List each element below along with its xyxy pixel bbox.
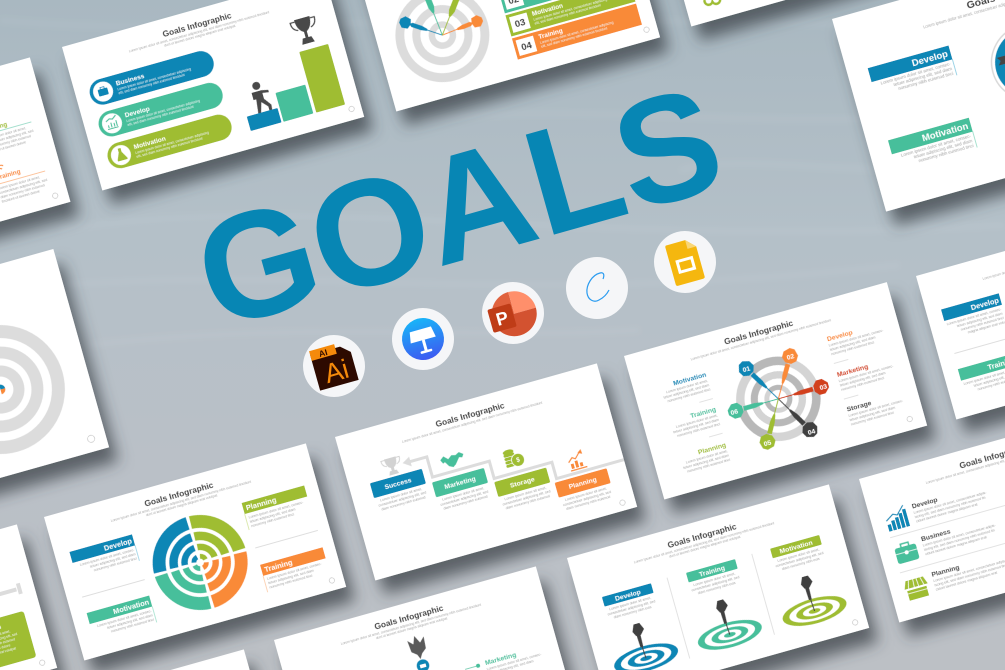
text: storage: tetuer adipiscing elit, sed diam: [849, 406, 896, 422]
dart numbers: 03: [819, 383, 828, 392]
pill: motivation: Lorem ipsum dolor sit amet, consectetuer adipiscing: [135, 131, 209, 155]
title: Goals Infographic: [434, 400, 506, 429]
subtitle: dunt ut laoreet dolore magna aliquam erat volutpat.: [164, 24, 237, 48]
label: develop: [941, 293, 1005, 340]
text: storage: Lorem ipsum dolor sit amet, consec-: [848, 399, 904, 418]
label: marketing: Marketing: [484, 652, 517, 667]
text: storage: Storage: [846, 400, 873, 414]
dart 03: [776, 378, 830, 406]
tag: develop: diam nonummy nibh euis: [613, 605, 652, 619]
text: develop: nonummy nibh euismod tinci: [831, 340, 875, 356]
label: training: tetuer adipiscing elit, sed diam: [268, 569, 314, 585]
box: storage: consectetuer adipiscing elit, sed: [502, 489, 551, 507]
text: motivation: Motivation: [673, 372, 707, 388]
label: motivation: nonummy nibh euismod tinci: [918, 143, 974, 163]
text: business: Lorem ipsum dolor sit amet, consectetuer adipis-: [922, 523, 997, 548]
text: business: iscing elit, sed diam nonummy nibh euismod tin: [924, 528, 995, 552]
icon: bag: [893, 540, 920, 564]
text: training: Lorem ipsum dolor sit amet,: [675, 413, 718, 429]
text: marketing: [836, 357, 897, 392]
icon: trophy: [290, 15, 321, 46]
text: marketing: nonummy nibh euismod tinci: [841, 376, 885, 392]
slide: bottom left partial: [0, 524, 57, 670]
target badge: [983, 16, 1005, 109]
icon: handshake: [439, 451, 466, 470]
subtitle: dunt ut laoreet dolore magna aliquam erat volutpat.: [669, 535, 742, 559]
tag: motivation: consectetuer adipiscing elit, sed: [775, 551, 824, 568]
segmented target rings: [731, 352, 825, 446]
dart: green: [440, 0, 463, 36]
box: planning: diam nonummy nibh euismod: [566, 495, 611, 511]
label: training: [958, 353, 1005, 395]
text: planning: cidunt laoreet dolore magna aliquam erat: [935, 571, 998, 592]
box: storage: Storage: [509, 476, 536, 490]
page number: [906, 416, 913, 422]
text: marketing: Lorem ipsum dolor sit amet, consec-: [838, 364, 895, 383]
tag: training: Training: [698, 565, 726, 579]
tag: training: [686, 559, 742, 597]
text: develop: [826, 321, 887, 356]
page number: [619, 499, 626, 506]
dart numbers: [720, 347, 839, 456]
dart numbers: 02: [786, 353, 795, 362]
label: develop: Lorem ipsum dolor sit amet, consec-: [946, 307, 1002, 326]
label: motivation: Lorem ipsum dolor sit amet, consec-: [900, 133, 972, 158]
box: marketing: [432, 468, 492, 512]
text: marketing: Marketing: [836, 363, 869, 379]
dividers: [890, 468, 1005, 573]
label: marketing: [484, 645, 544, 670]
slide: six darts: [624, 282, 927, 499]
subtitle: Lorem ipsum dolor sit amet, consectetuer adipiscing elit, sed diam nonummy nibh euismod tincidunt: [402, 401, 543, 444]
dart numbers: 04: [807, 428, 817, 437]
title: Goals Infographic: [161, 10, 233, 39]
dart target: green: [773, 567, 850, 632]
icon: green partial: [704, 0, 721, 7]
icon: orange signal: [0, 165, 5, 174]
text: motivation: [660, 372, 711, 404]
icon: bar chart: [883, 505, 910, 532]
row 03: 03: [514, 17, 527, 30]
dart 06: [726, 392, 780, 420]
pill: motivation: Motivation: [133, 135, 167, 151]
slide: icon list: [859, 405, 1005, 622]
tag: develop: Develop: [614, 589, 642, 603]
text: planning: Lorem ipsum dolor sit amet,: [685, 449, 728, 465]
text: marketing: tetuer adipiscing elit, sed diam: [840, 371, 886, 388]
slide: bottom left corner partial: [0, 649, 284, 670]
text: planning: Planning: [697, 442, 727, 456]
dart: teal: [422, 0, 445, 36]
icon: blue circle: [415, 658, 431, 670]
label: motivation: tetuer adipiscing elit, sed diam: [107, 613, 153, 630]
text: develop: iscing elit, sed diam nonummy nibh euismod tin: [914, 496, 986, 519]
icon: growth chart: [566, 448, 588, 472]
row 03: [505, 0, 636, 37]
tag: motivation: Lorem ipsum dolor sit amet,: [777, 548, 820, 563]
dart target: blue: [605, 615, 681, 670]
label: develop: nonummy nibh euismod tinci: [93, 556, 137, 572]
row 04: Lorem ipsum dolor sit amet, consectetuer adipiscing: [540, 20, 614, 45]
text: business: Business: [920, 528, 952, 543]
text: planning: nonummy nibh euismod tinci: [687, 458, 731, 474]
dart 01: [735, 358, 783, 404]
label: develop: tetuer adipiscing elit, sed diam: [90, 552, 136, 569]
tag: motivation: [770, 535, 826, 573]
label: motivation: Lorem ipsum dolor sit amet, consec-: [97, 609, 153, 628]
label: develop: Develop: [911, 49, 949, 69]
icon: coins: [502, 446, 526, 470]
row 04: [512, 4, 642, 60]
label: develop: [868, 45, 957, 98]
slide: dart target with numbered rows: [356, 0, 660, 111]
lines and lorem text: diam nonummy nibh euismod: [0, 183, 45, 199]
label: develop: Develop: [103, 536, 133, 553]
text: training: [670, 406, 721, 439]
label: develop: tetuer adipiscing elit, sed diam: [956, 312, 1003, 328]
dart 05: [758, 397, 786, 451]
small dividers: [699, 359, 858, 437]
subtitle: Lorem ipsum dolor sit amet, consectetuer adipiscing elit, sed diam nonummy nibh euismod tincidunt: [690, 318, 831, 362]
page number: [643, 26, 650, 33]
slide: quadrant donut: [44, 443, 346, 660]
page number: [87, 434, 96, 443]
text: develop: Develop: [826, 329, 854, 343]
label: planning: [242, 485, 312, 530]
divider: [954, 336, 1005, 353]
app icon: google slides: [647, 224, 723, 300]
pill: business: [87, 48, 217, 108]
label: develop: magna aliquam erat volu: [967, 320, 1005, 334]
icon: gray arrow tail: [406, 633, 429, 661]
label: planning: nonummy nibh euismod tinci: [251, 512, 295, 528]
label: develop: tetuer adipiscing elit, sed diam: [893, 66, 953, 87]
row 04: Training: [538, 28, 564, 41]
main heading: GOALS: GOALS: [179, 53, 739, 360]
tag: motivation: diam nonummy nibh euis: [782, 557, 820, 571]
label: motivation: tetuer adipiscing elit, sed diam: [913, 138, 973, 159]
tag: develop: consectetuer adipiscing elit, sed: [607, 599, 656, 617]
dart 02: [771, 347, 799, 401]
dart: blue: [398, 15, 444, 41]
app icon: illustrator: AI: [318, 347, 329, 359]
connector: [465, 663, 481, 670]
label: motivation: [87, 595, 157, 640]
text: develop: [911, 483, 990, 524]
box: motivation: [0, 611, 36, 670]
quadrant target chart: [150, 512, 251, 613]
label: training: Lorem ipsum dolor sit amet, consec-: [267, 562, 323, 581]
tag: training: consectetuer adipiscing elit, sed: [691, 575, 740, 592]
title: Goals Infographic: [143, 480, 215, 509]
label: motivation: [888, 118, 977, 170]
text: develop: Lorem ipsum dolor sit amet, consec-: [828, 328, 885, 348]
text: training: Training: [690, 406, 717, 420]
box: success: diam nonummy nibh euismod: [381, 495, 426, 512]
target centre: [0, 383, 7, 394]
lines and lorem text: tincidunt ut laoreet dolore: [1, 189, 40, 204]
dividers: [82, 530, 318, 597]
tag: training: diam nonummy nibh euis: [697, 581, 736, 595]
label: planning: Lorem ipsum dolor sit amet, consec-: [248, 500, 304, 520]
label: develop: Develop: [970, 296, 1000, 312]
title: Goals Infographic: [666, 521, 738, 550]
pill: develop: elit, sed diam nonummy nibh euismod tincidunt: [127, 105, 194, 127]
row 02: [499, 0, 629, 13]
slide: three darts: [567, 484, 869, 670]
subtitle: Lorem ipsum dolor sit amet, consectetuer adipiscing elit, sed diam nonummy nibh euismod tincidunt: [633, 521, 775, 564]
box: planning: Planning: [568, 476, 598, 491]
box: success: consectetuer adipiscing elit, sed: [378, 490, 427, 508]
target rings: [390, 0, 495, 88]
text: planning: [931, 551, 1005, 592]
arrow path: [401, 401, 624, 518]
pill: business: Lorem ipsum dolor sit amet, consectetuer adipiscing: [117, 67, 191, 91]
label: develop: Lorem ipsum dolor sit amet, consec-: [880, 61, 952, 86]
label: training: Training: [263, 558, 294, 574]
label: planning: Planning: [245, 495, 278, 512]
row 04: elit, sed diam nonummy nibh euismod tincidunt: [541, 26, 608, 49]
app icon: canva: [566, 257, 628, 319]
text: business: [920, 516, 999, 556]
row 04: 04: [520, 40, 534, 53]
slide: top partial: [651, 0, 953, 26]
dart target: teal: [688, 591, 765, 656]
page number: [852, 619, 859, 626]
label: planning: tetuer adipiscing elit, sed diam: [249, 507, 296, 524]
app icon: powerpoint: [475, 275, 551, 351]
text: develop: tetuer adipiscing elit, sed diam: [830, 335, 876, 352]
box: marketing: Lorem ipsum dolor sit amet,: [442, 486, 485, 502]
subtitle: dunt ut laoreet dolore magna aliquam erat volutpat.: [146, 493, 218, 517]
box: marketing: Marketing: [444, 476, 477, 491]
box: planning: Lorem ipsum dolor sit amet,: [565, 486, 607, 502]
lines and lorem text: [0, 122, 51, 204]
stairs chart: [234, 44, 345, 131]
box: marketing: consectetuer adipiscing elit, sed: [440, 490, 489, 507]
text: motivation: Lorem ipsum dolor sit amet,: [666, 379, 708, 394]
pill: motivation: elit, sed diam nonummy nibh euismod tincidunt: [136, 136, 203, 159]
page number: [52, 192, 59, 199]
subtitle: dunt ut laoreet dolore magna aliquam erat volutpat.: [376, 616, 448, 640]
box: storage: diam nonummy nibh euismod: [505, 494, 550, 510]
subtitle: Lorem ipsum dolor sit amet, consectetuer adipiscing elit, sed diam nonummy nibh euismod tincidunt: [110, 480, 252, 523]
row 03: Motivation: [531, 3, 564, 18]
subtitle: Lorem ipsum dolor sit amet, consectetuer adipiscing elit, sed diam nonummy nibh euismod tincidunt: [128, 10, 270, 53]
target rings: [0, 318, 72, 461]
slide: stairs with pills: [62, 0, 364, 190]
box: storage: [494, 468, 554, 511]
text: motivation: nonummy nibh euismod tinci: [667, 387, 711, 403]
label: develop: Lorem ipsum dolor sit amet, consec-: [79, 548, 136, 567]
text: storage: nonummy nibh euismod tinci: [850, 411, 894, 427]
app icon: illustrator: [296, 328, 372, 404]
tag: develop: [602, 583, 658, 621]
box: storage: Lorem ipsum dolor sit amet,: [504, 486, 547, 501]
dart numbers: 05: [763, 439, 772, 448]
icon: walking person: [249, 79, 274, 114]
slide: stepped process: [335, 363, 637, 580]
page number: [39, 659, 46, 666]
text: storage: [846, 391, 907, 427]
text: develop: Develop: [911, 497, 939, 511]
icon: trophy: [381, 455, 403, 477]
text: motivation: tetuer adipiscing elit, sed diam: [663, 383, 710, 400]
label: develop: [69, 534, 139, 578]
box: planning: [555, 468, 615, 512]
pill: motivation: [104, 112, 235, 171]
dart numbers: 01: [742, 365, 751, 374]
title: Goals Infographic: [373, 603, 445, 632]
pill: develop: Develop: [124, 106, 151, 119]
text: training: nonummy nibh euismod tinci: [677, 422, 721, 438]
label: motivation: Motivation: [921, 121, 970, 144]
text: planning: tetuer adipiscing elit, sed diam: [683, 453, 729, 470]
label: training: [260, 547, 330, 592]
slide: right middle: [916, 202, 1005, 419]
pill: develop: Lorem ipsum dolor sit amet, consectetuer adipiscing: [126, 99, 200, 123]
label: develop: nonummy nibh euismod tinci: [898, 71, 954, 91]
dart: orange: [440, 14, 485, 41]
pill: business: elit, sed diam nonummy nibh euismod tincidunt: [118, 73, 185, 95]
subtitle: Lorem ipsum dolor sit amet, consectetuer adipiscing elit, sed diam nonummy nibh euismod tincidunt: [340, 603, 482, 646]
app icon: illustrator: Ai: [321, 354, 352, 389]
slide: right top large: [832, 0, 1005, 212]
tag: motivation: Motivation: [779, 540, 814, 556]
column dividers: [667, 554, 774, 659]
tag: develop: Lorem ipsum dolor sit amet,: [609, 596, 652, 611]
app icon: powerpoint: P: [494, 307, 511, 330]
label: motivation: Motivation: [112, 597, 151, 616]
box: planning: consectetuer adipiscing elit, sed: [563, 490, 612, 507]
text: develop: Lorem ipsum dolor sit amet, consectetuer adipis-: [913, 490, 988, 515]
text: develop: cidunt laoreet dolore magna aliquam erat: [916, 502, 978, 524]
dart 04: [773, 393, 821, 441]
box: success: Success: [384, 477, 413, 491]
box: marketing: diam nonummy nibh euismod: [443, 494, 488, 511]
text: training: tetuer adipiscing elit, sed diam: [673, 418, 719, 434]
label: motivation: nonummy nibh euismod tinci: [111, 618, 155, 634]
pill: business: Business: [115, 73, 146, 88]
gray arrow bar: [0, 583, 21, 612]
box: success: [370, 469, 430, 513]
lines and lorem text: consectetuer adipiscing elit, sed: [0, 178, 48, 195]
dart numbers: 06: [730, 408, 739, 417]
box: success: Lorem ipsum dolor sit amet,: [380, 487, 422, 503]
label: training: nonummy nibh euismod tinci: [269, 574, 313, 590]
text: planning: iscing elit, sed diam nonummy nibh euismod tin: [934, 564, 1005, 587]
slide: bottom centre: [274, 566, 576, 670]
icon: coins: $: [516, 457, 521, 464]
label: develop: nonummy nibh euismod tinci: [960, 316, 1004, 332]
text: business: cidunt laoreet dolore magna aliquam erat: [925, 535, 987, 556]
app icon: keynote: [385, 301, 461, 377]
pill: develop: [96, 80, 226, 139]
icon: storefront: [903, 576, 931, 601]
row 03: elit, sed diam nonummy nibh euismod tincidunt: [534, 3, 601, 26]
tag: training: Lorem ipsum dolor sit amet,: [693, 572, 736, 587]
text: planning: Planning: [931, 564, 960, 579]
slide: left target large: [0, 249, 109, 546]
text: planning: Lorem ipsum dolor sit amet, consectetuer adipis-: [933, 559, 1005, 583]
page number: [329, 577, 335, 584]
page number: [348, 106, 355, 112]
text: planning: [680, 442, 731, 474]
slide: left partial training: [0, 57, 70, 275]
title: Goals Infographic: [723, 318, 795, 347]
